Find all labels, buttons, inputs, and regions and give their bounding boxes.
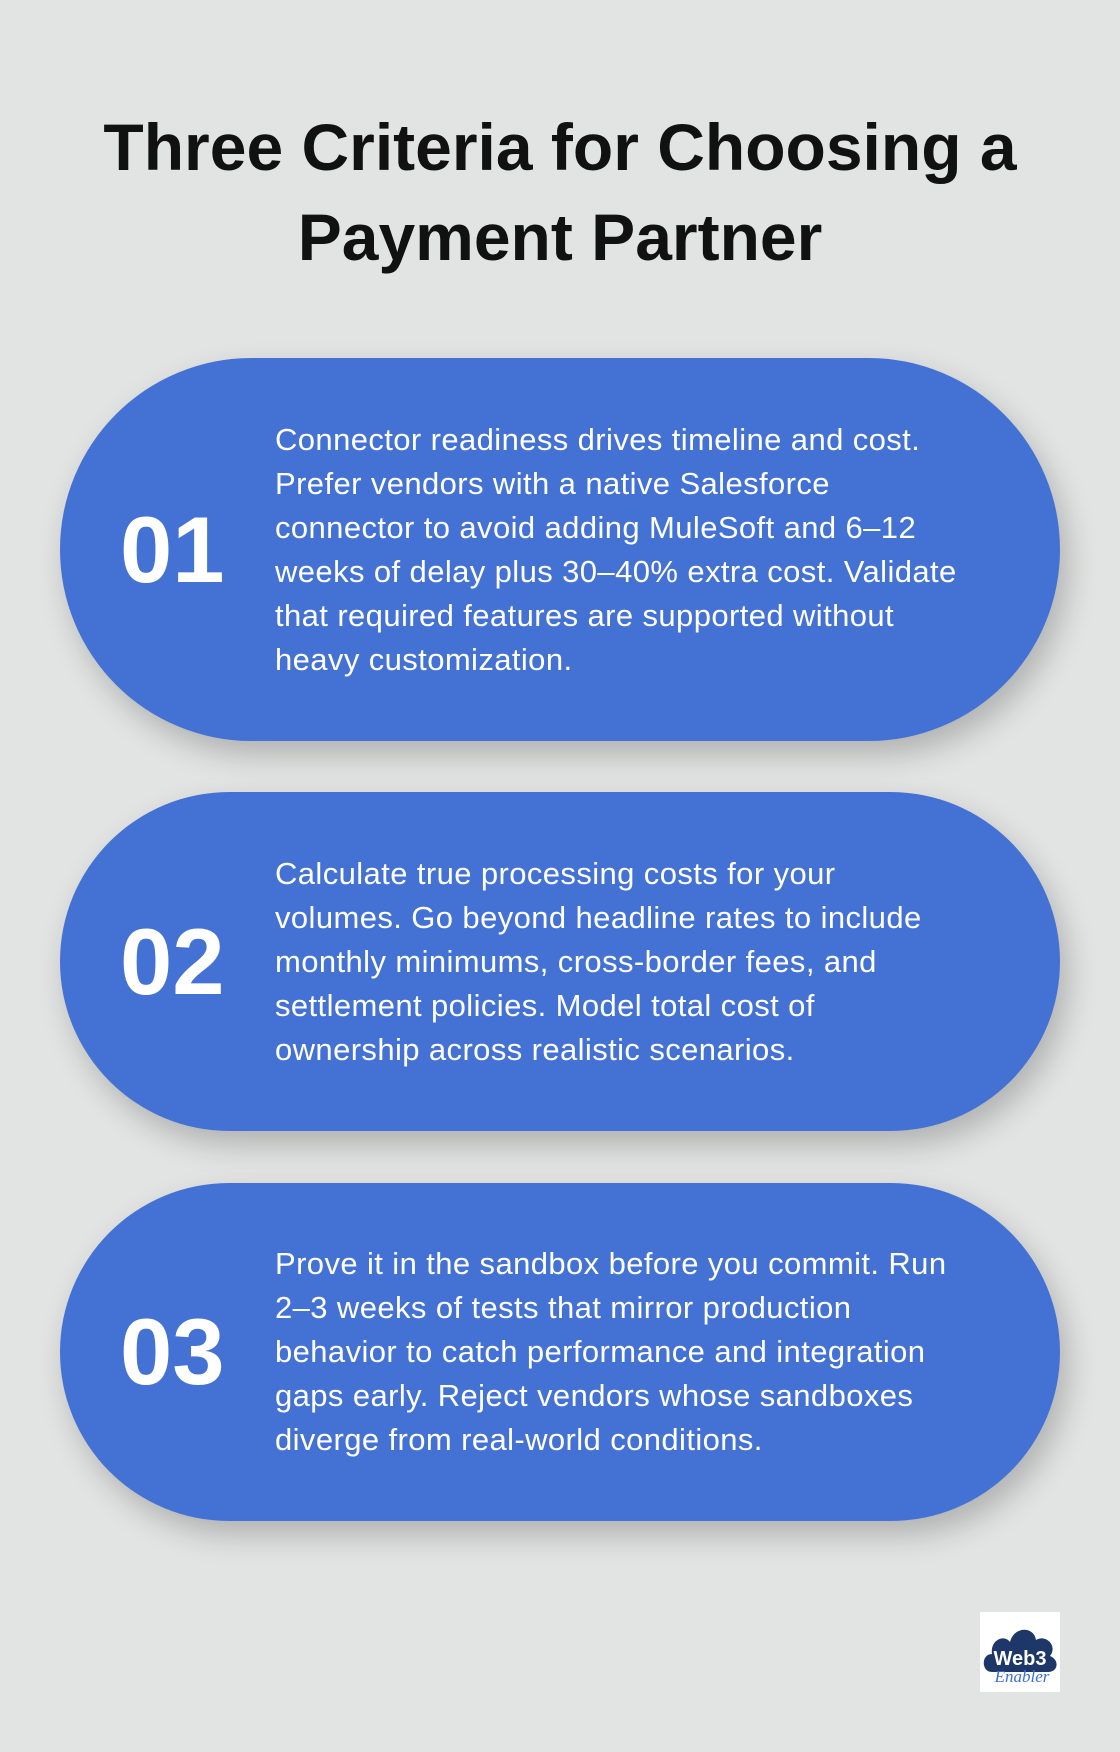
text 02 bbox=[275, 856, 922, 1066]
text 03: gaps early. Reject vendors whose sandboxes bbox=[275, 1378, 913, 1413]
number 02: 02 bbox=[120, 908, 225, 1014]
panel: criterion 02 bbox=[60, 792, 1060, 1131]
panel: criterion 01 bbox=[60, 358, 1060, 741]
logo bbox=[980, 1612, 1060, 1692]
text 01: weeks of delay plus 30–40% extra cost. Validate bbox=[275, 554, 957, 588]
text 02: settlement policies. Model total cost of bbox=[275, 988, 815, 1022]
logo: Web3 bbox=[994, 1648, 1046, 1670]
number 03: 03 bbox=[120, 1299, 225, 1404]
text 01: connector to avoid adding MuleSoft and 6–12 bbox=[275, 510, 916, 544]
text 01: Prefer vendors with a native Salesforce bbox=[275, 466, 830, 500]
panel: criterion 03 bbox=[60, 1183, 1060, 1521]
text 03: 2–3 weeks of tests that mirror production bbox=[275, 1290, 851, 1325]
title bbox=[103, 110, 1017, 274]
number 01: 01 bbox=[120, 496, 225, 602]
text 01: that required features are supported without bbox=[275, 598, 894, 632]
text 02: Calculate true processing costs for your bbox=[275, 856, 835, 890]
text 03: behavior to catch performance and integration bbox=[275, 1334, 925, 1369]
logo: Enabler bbox=[994, 1667, 1050, 1686]
text 01 bbox=[275, 422, 957, 676]
text 02: volumes. Go beyond headline rates to include bbox=[275, 900, 922, 934]
text 03: Prove it in the sandbox before you commit. Run bbox=[275, 1246, 946, 1281]
title: Three Criteria for Choosing a bbox=[103, 110, 1017, 184]
title: Payment Partner bbox=[298, 200, 822, 274]
text 01: Connector readiness drives timeline and cost. bbox=[275, 422, 920, 456]
text 03: diverge from real-world conditions. bbox=[275, 1422, 763, 1457]
text 03 bbox=[275, 1246, 946, 1457]
text 01: heavy customization. bbox=[275, 642, 572, 676]
text 02: ownership across realistic scenarios. bbox=[275, 1032, 795, 1066]
text 02: monthly minimums, cross-border fees, and bbox=[275, 944, 877, 978]
